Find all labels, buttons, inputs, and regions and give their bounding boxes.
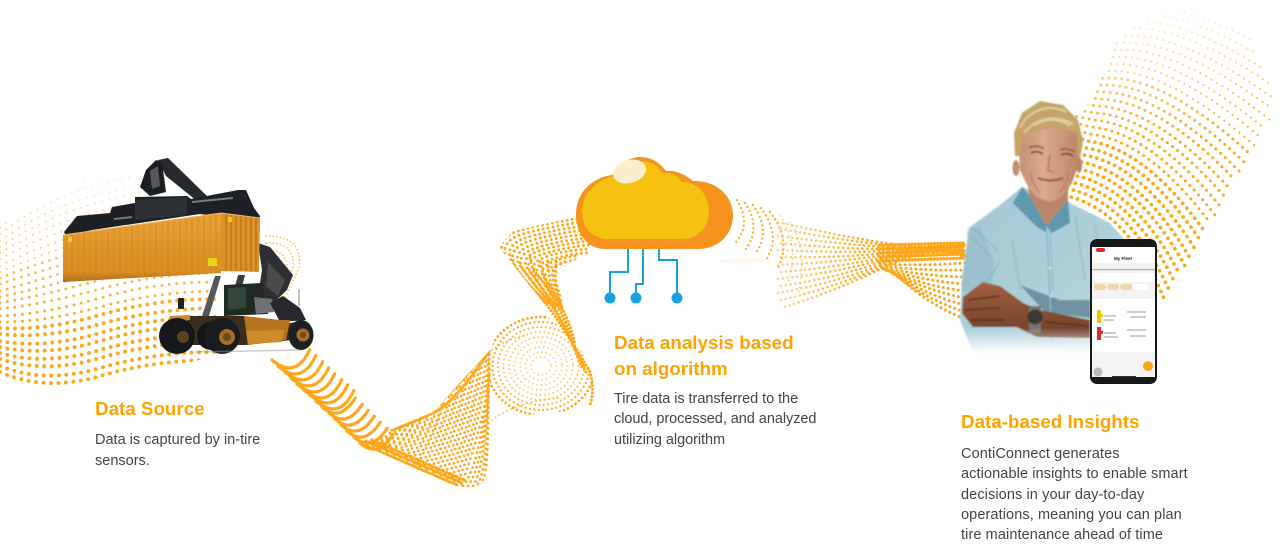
boom	[158, 158, 207, 201]
text: insights: operations, meaning you can plan	[961, 507, 1182, 523]
bottom fade	[950, 328, 1095, 362]
text: insights: decisions in your day-to-day	[961, 487, 1144, 503]
text: insights: tire maintenance ahead of time	[961, 527, 1163, 543]
heading: data analysis: Data analysis based	[614, 332, 794, 353]
faint streak	[719, 258, 771, 264]
face features	[1029, 146, 1075, 152]
dotted wave: lower fold	[360, 350, 494, 486]
text: insights: actionable insights to enable smart	[961, 466, 1188, 482]
cab	[224, 283, 268, 316]
dotted wave: neck	[545, 302, 592, 405]
dotted wave: cloud to insights	[735, 200, 965, 319]
dotted wave: light blob	[487, 317, 595, 420]
watch	[1029, 306, 1041, 333]
text: data source: Data is captured by in-tire	[95, 432, 260, 448]
text: insights	[961, 446, 1188, 543]
heading: data analysis	[614, 332, 794, 379]
shirt	[960, 187, 1125, 358]
spreader	[64, 190, 260, 236]
dotted wave: data source	[0, 160, 215, 383]
icon: reach stacker with container	[63, 158, 314, 354]
text: insights: ContiConnect generates	[961, 446, 1120, 462]
chassis	[186, 316, 296, 345]
heading: data analysis: on algorithm	[614, 358, 728, 379]
neck	[1028, 184, 1068, 226]
dotted wave: upper fold	[502, 218, 591, 312]
wheels	[159, 318, 195, 354]
photo: man with crossed arms	[950, 101, 1125, 362]
arms	[962, 282, 1090, 338]
collar	[1013, 187, 1070, 233]
dotted fan behind boom	[266, 236, 300, 300]
hair	[1014, 101, 1083, 160]
heading: data source: Data Source	[95, 398, 205, 419]
heading: insights: Data-based Insights	[961, 411, 1139, 432]
dotted wave: scalloped band	[272, 349, 394, 449]
head	[1018, 122, 1080, 202]
dotted wave: top right	[1067, 9, 1272, 300]
text: data source: sensors.	[95, 453, 150, 469]
icon: smartphone app	[1090, 239, 1157, 384]
text: data analysis: cloud, processed, and analyzed	[614, 411, 816, 427]
text: data analysis: Tire data is transferred to the	[614, 391, 798, 407]
text: data source	[95, 432, 260, 469]
container	[63, 213, 221, 282]
text: data analysis: utilizing algorithm	[614, 432, 725, 448]
app title: My Fleet	[1114, 256, 1132, 261]
icon: cloud with circuit	[576, 156, 733, 304]
text: data analysis	[614, 391, 816, 448]
mast legs	[202, 276, 221, 316]
